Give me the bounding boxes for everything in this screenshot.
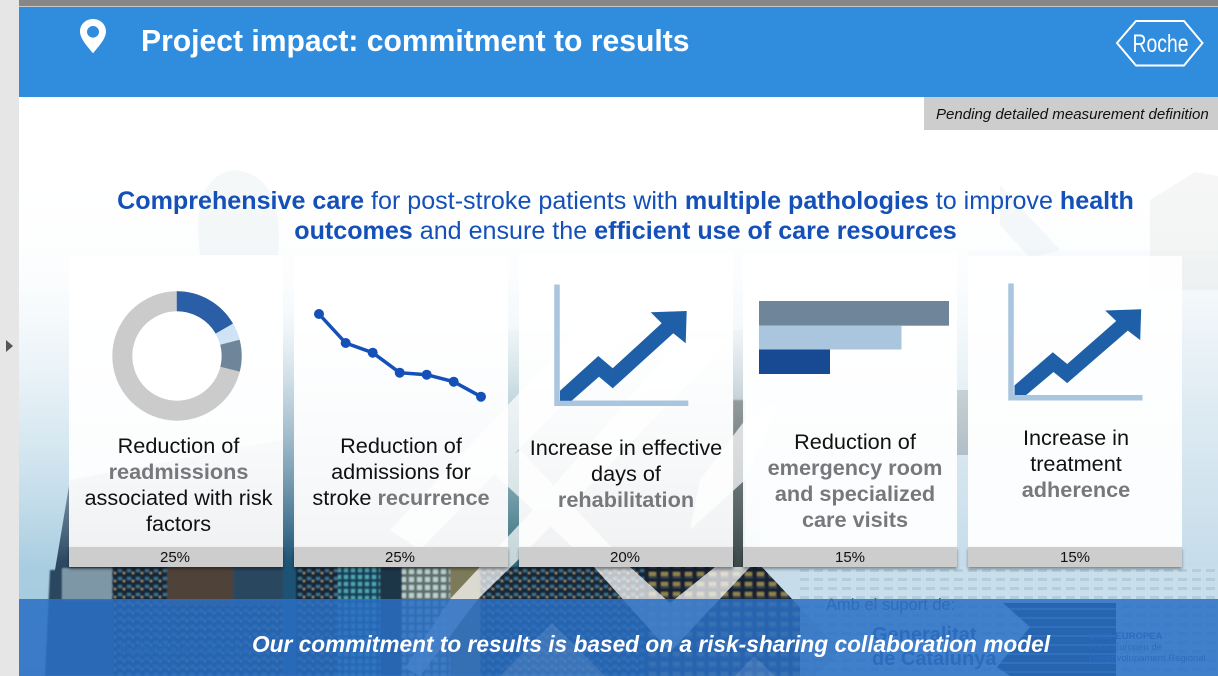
logo: Roche xyxy=(1116,20,1204,66)
text: recurrence: admissions for xyxy=(331,459,471,484)
text: institute: Institut Català de la Salut xyxy=(119,642,264,657)
top right building xyxy=(1150,172,1218,290)
text: rehabilitation xyxy=(530,435,722,512)
panel: adherence xyxy=(968,256,1182,567)
panel: rehabilitation xyxy=(519,253,733,567)
text: readmissions: readmissions xyxy=(109,459,248,484)
logo: Roche: Roche xyxy=(1132,30,1188,58)
weight: 20%: 20% xyxy=(610,549,640,566)
text: emergency visits xyxy=(768,429,942,532)
weight: 25%: 25% xyxy=(385,549,415,566)
text: rehabilitation: days of xyxy=(591,461,661,486)
background city photo xyxy=(19,170,1218,676)
weight: 20% xyxy=(519,547,733,567)
note: pending definition: Pending detailed measurement definition xyxy=(936,106,1209,123)
header band xyxy=(19,0,1218,97)
icon: expand triangle xyxy=(6,340,13,352)
bar chart xyxy=(759,301,949,374)
text: rehabilitation: Increase in effective xyxy=(530,435,722,460)
text: European fund: Desenvolupament Regional xyxy=(1089,653,1206,664)
text: readmissions: Reduction of xyxy=(118,433,239,458)
text: adherence: adherence xyxy=(1022,477,1130,502)
panel: recurrence xyxy=(294,256,508,567)
text: readmissions: associated with risk xyxy=(84,485,273,510)
text: adherence xyxy=(1022,425,1130,502)
title: Project impact: commitment to results xyxy=(141,25,690,58)
text: recurrence xyxy=(312,433,490,510)
chevrons xyxy=(390,265,780,676)
line chart xyxy=(314,309,486,402)
text: European fund xyxy=(1089,631,1206,664)
faint logos under band xyxy=(119,596,1206,670)
text: emergency visits: emergency room xyxy=(768,455,942,480)
weight: 15%: 15% xyxy=(1060,549,1090,566)
text: rehabilitation: rehabilitation xyxy=(558,487,694,512)
text: adherence: Increase in xyxy=(1023,425,1129,450)
subtitle xyxy=(117,187,1134,245)
buildings: upper towers xyxy=(55,340,743,571)
panel: readmissions xyxy=(69,256,283,567)
person silhouette xyxy=(198,170,279,255)
panel: emergency visits xyxy=(743,253,957,567)
banner text: Our commitment to results is based on a risk-sharing collaboration model xyxy=(252,631,1050,657)
top grey strip xyxy=(19,0,1218,7)
subtitle: outcomes and ensure the efficient use of care resources xyxy=(294,217,957,245)
note: pending definition xyxy=(924,97,1218,130)
text: emergency visits: and specialized xyxy=(775,481,935,506)
text: adherence: treatment xyxy=(1030,451,1122,476)
donut chart xyxy=(112,291,242,421)
text: readmissions: factors xyxy=(146,511,211,536)
pale right side xyxy=(760,250,1218,676)
text: emergency visits: Reduction of xyxy=(794,429,916,454)
weight: 15% xyxy=(743,547,957,567)
subtitle: Comprehensive care for post-stroke patients with multiple pathologies to improve health xyxy=(117,187,1134,215)
buildings: city skyline xyxy=(45,400,850,676)
text: European fund: Fons Europeu de xyxy=(1089,642,1162,653)
weight: 25% xyxy=(294,547,508,567)
text: Generalitat: Generalitat xyxy=(872,624,976,646)
text: support credit: Amb el suport de: xyxy=(826,596,955,614)
weight: 25% xyxy=(69,547,283,567)
icon: location pin xyxy=(80,19,106,54)
text: Generalitat: de Catalunya xyxy=(872,648,996,670)
weight: 15% xyxy=(968,547,1182,567)
text: readmissions xyxy=(84,433,273,536)
banner xyxy=(19,599,1218,676)
text: emergency visits: care visits xyxy=(802,507,908,532)
text: European fund: UNIÓ EUROPEA xyxy=(1089,631,1162,642)
arrow chart xyxy=(554,284,688,406)
left sidebar xyxy=(0,0,19,676)
text: recurrence: Reduction of xyxy=(340,433,462,458)
text: recurrence: stroke recurrence xyxy=(312,485,490,510)
arrow chart xyxy=(1008,284,1142,400)
weight: 25%: 25% xyxy=(160,549,190,566)
weight: 15%: 15% xyxy=(835,549,865,566)
building: striped tower xyxy=(997,603,1116,676)
text: Generalitat xyxy=(872,624,996,670)
